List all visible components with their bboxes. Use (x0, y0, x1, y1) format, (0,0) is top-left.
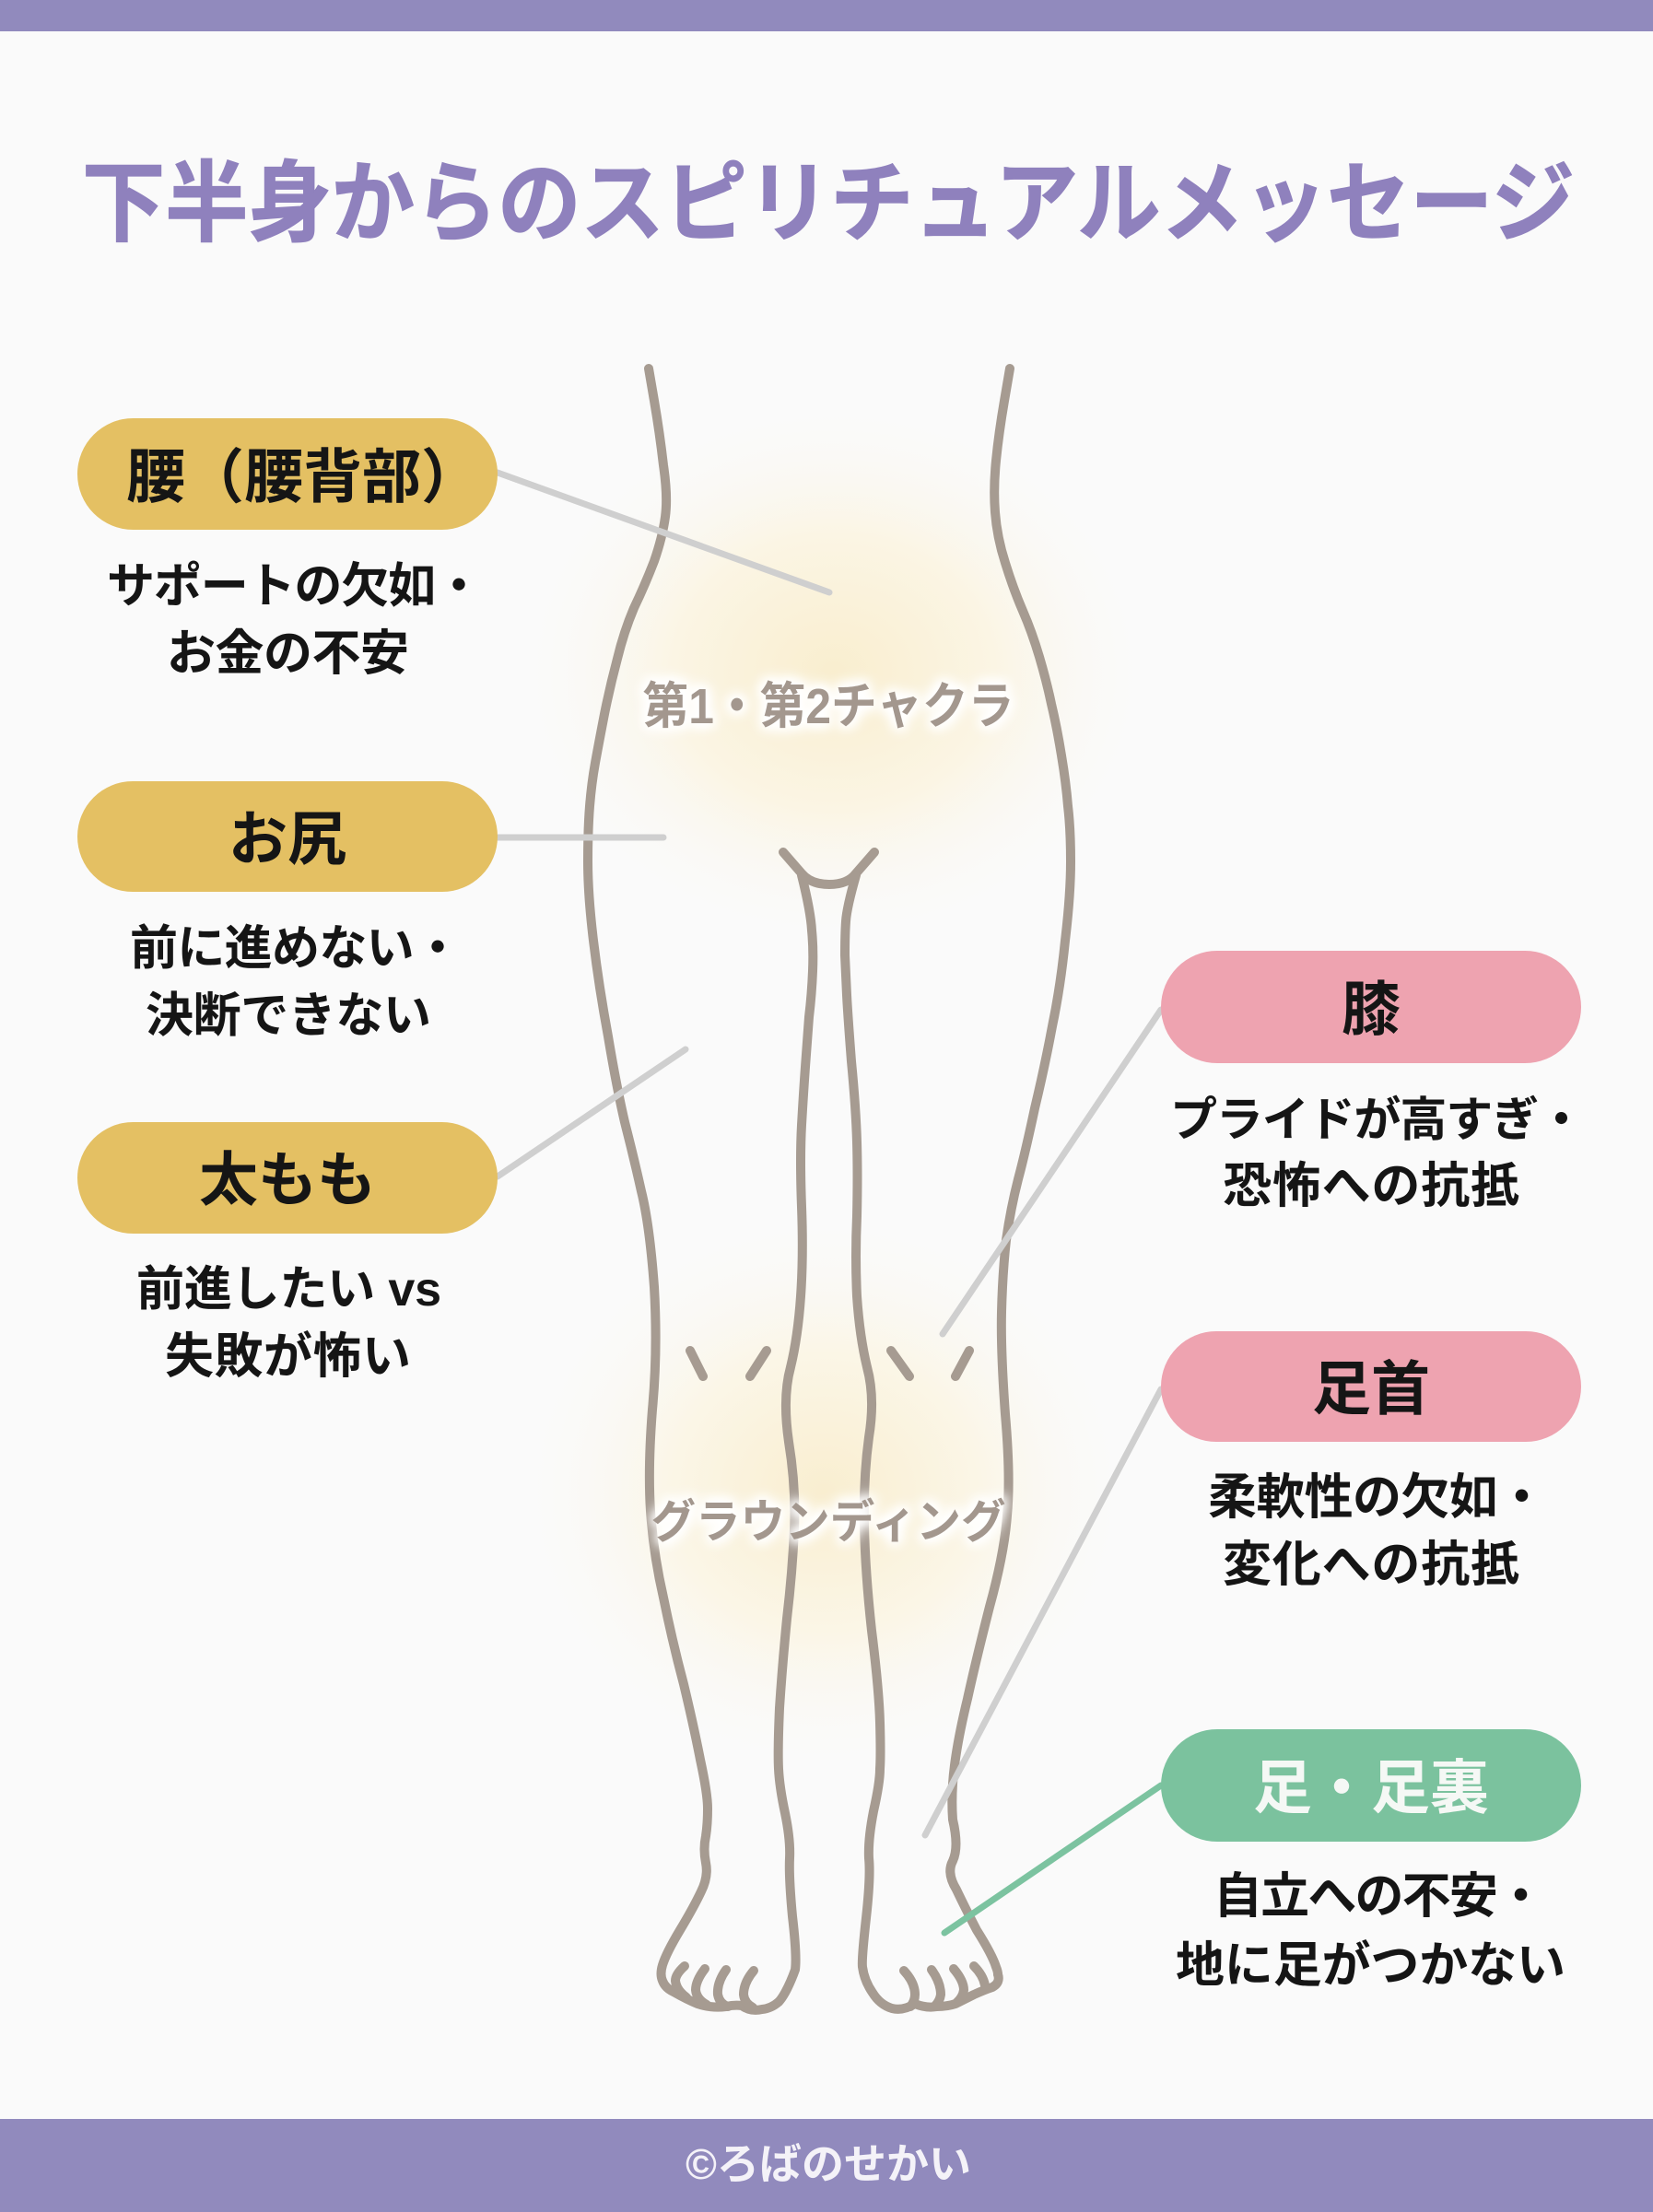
leader: foot (944, 1785, 1161, 1933)
label: grounding: グラウンディング (651, 1496, 1006, 1548)
pill label: お尻 (229, 806, 346, 872)
lower body outline (588, 369, 1071, 2010)
panel: feet and soles (1161, 1729, 1581, 1993)
description: お金の不安 (167, 626, 409, 681)
pill (77, 1122, 498, 1234)
panel: waist (77, 418, 498, 681)
left inner contour (779, 875, 813, 2002)
left outer contour (588, 369, 779, 2010)
panel: ankles (1161, 1331, 1581, 1592)
footer band (0, 2119, 1653, 2212)
description (1176, 1869, 1565, 1993)
description: 恐怖への抗抵 (1223, 1159, 1519, 1213)
description (107, 560, 483, 681)
description (130, 922, 462, 1043)
top band (0, 0, 1653, 31)
pill label: 太もも (199, 1147, 376, 1213)
right inner contour (845, 875, 999, 2009)
description: 失敗が怖い (165, 1329, 411, 1384)
kneecap marks (690, 1351, 969, 1376)
pill (77, 418, 498, 530)
leader: hips (498, 835, 663, 840)
pill label: 足首 (1312, 1356, 1430, 1422)
footer credit: ©ろばのせかい (686, 2140, 971, 2188)
leader: thigh (498, 1049, 686, 1176)
pill (77, 781, 498, 892)
glow: upper chakra area (511, 396, 1156, 949)
right foot toes (904, 1966, 985, 2007)
description: 変化への抗抵 (1223, 1538, 1519, 1592)
label: first and second chakra: 第1・第2チャクラ (643, 679, 1014, 734)
description: 決断できない (146, 989, 431, 1043)
pill label: 足・足裏 (1253, 1755, 1489, 1821)
description: 前進したい vs (136, 1263, 441, 1317)
description (1208, 1470, 1546, 1592)
pill (1161, 1331, 1581, 1442)
panel: thighs (77, 1122, 498, 1384)
pill label: 腰（腰背部） (126, 444, 480, 510)
leader: ankle (925, 1389, 1161, 1835)
description: プライドが高すぎ・ (1170, 1094, 1585, 1146)
description: 前に進めない・ (130, 922, 462, 976)
pill label: 膝 (1342, 977, 1401, 1043)
pill (1161, 1729, 1581, 1842)
panel: hips (77, 781, 498, 1043)
left foot toes (675, 1966, 754, 2007)
description: 地に足がつかない (1176, 1938, 1565, 1993)
pill (1161, 951, 1581, 1063)
leader lines (498, 473, 1161, 1933)
leader: knee (943, 1010, 1161, 1334)
description: 自立への不安・ (1213, 1869, 1545, 1924)
leader: waist (498, 473, 829, 592)
description: 柔軟性の欠如・ (1208, 1470, 1546, 1525)
crotch curve (783, 852, 874, 884)
description: サポートの欠如・ (107, 560, 483, 614)
glow: grounding area (511, 1207, 1138, 1778)
description (136, 1263, 441, 1384)
right outer contour (950, 369, 1071, 1974)
title: 下半身からのスピリチュアルメッセージ (82, 155, 1575, 253)
description (1170, 1094, 1585, 1213)
panel: knees (1161, 951, 1585, 1213)
